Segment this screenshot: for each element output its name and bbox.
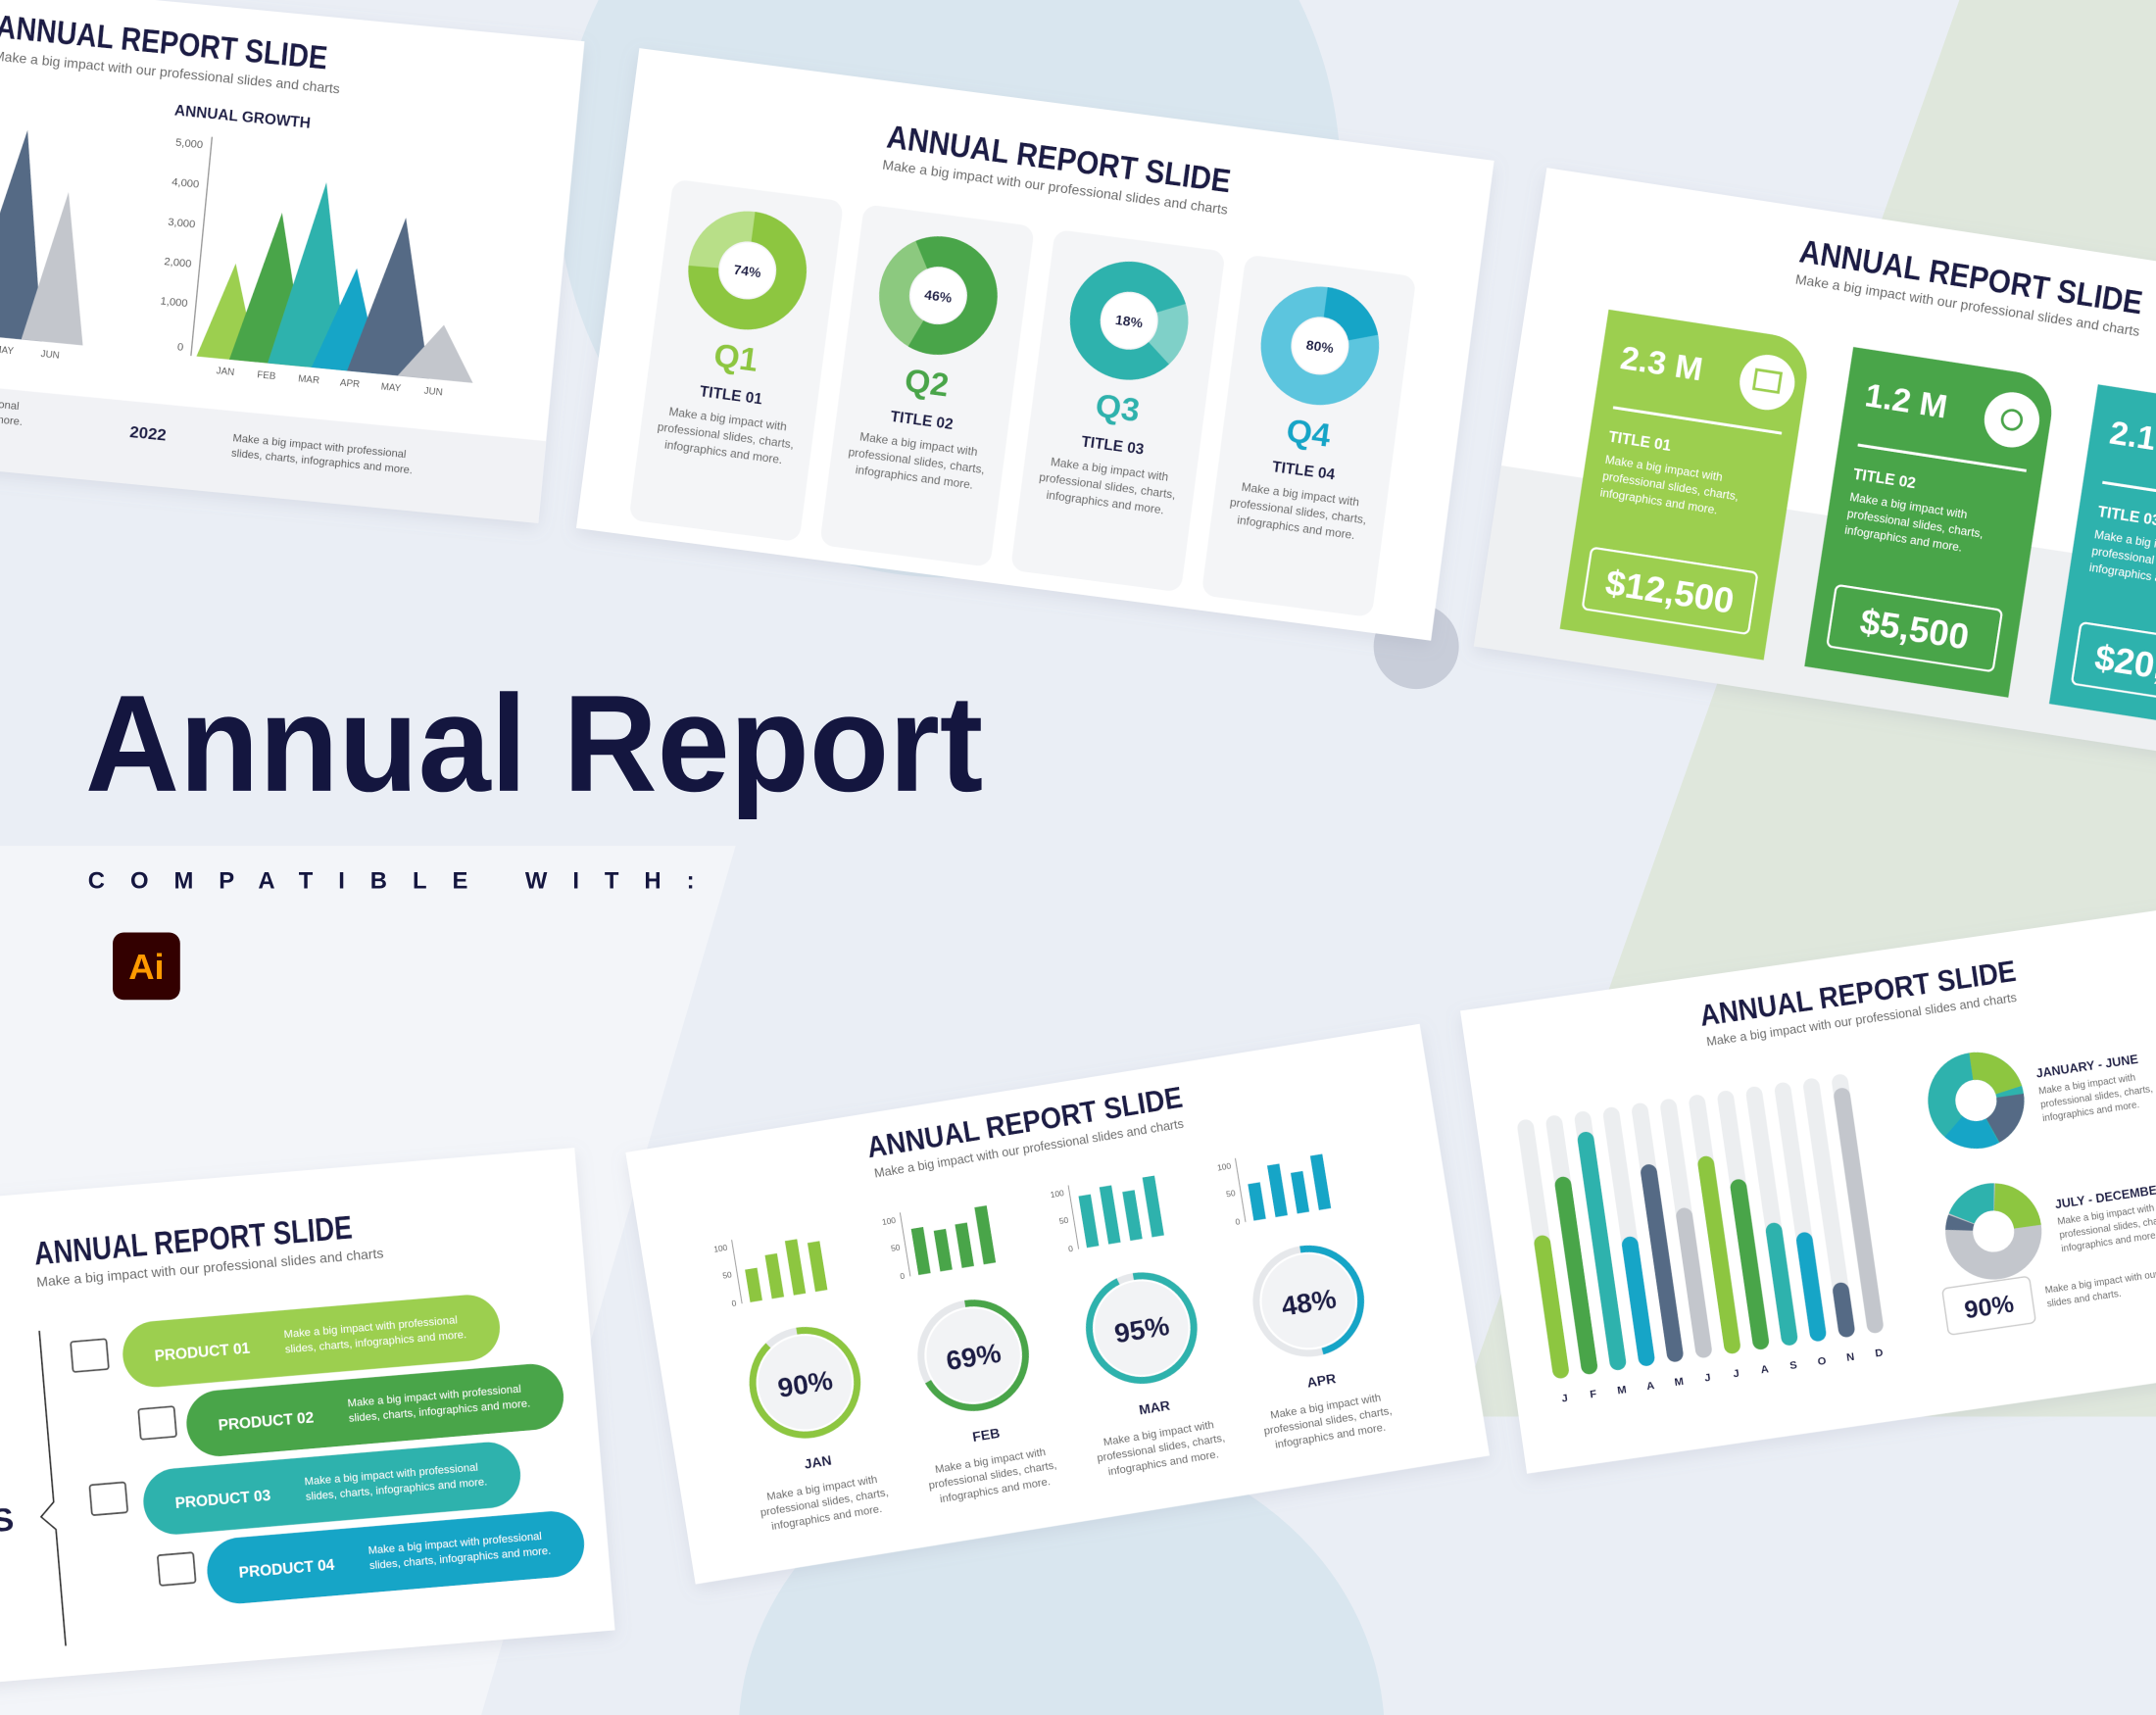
card 2: Make a big impact with: [1849, 490, 1968, 521]
column FEB: [881, 1195, 1060, 1507]
donut: January - June: infographics and more.: [2042, 1100, 2140, 1124]
slide: annual growth (top-left): 1,000: [160, 296, 188, 310]
bar chart: S: [1788, 1359, 1798, 1372]
card 1: TITLE 01: [1607, 429, 1673, 455]
bar chart: D: [1875, 1347, 1884, 1359]
card 1: professional slides, charts,: [1601, 468, 1740, 504]
panel Q4: TITLE 04: [1271, 459, 1336, 483]
product 01: slides, charts, infographics and more.: [284, 1329, 467, 1355]
product 03: slides, charts, infographics and more.: [306, 1476, 488, 1503]
bar chart: [1516, 1073, 1888, 1405]
column FEB: 50: [890, 1243, 902, 1253]
bar chart: A: [1760, 1363, 1770, 1376]
column APR: professional slides, charts,: [1263, 1405, 1393, 1438]
product 03: Make a big impact with professional: [304, 1462, 478, 1488]
product 02: PRODUCT 02: [218, 1409, 315, 1434]
slide: value cards (top-right): Make a big impact with our professional slides and charts: [1794, 271, 2141, 339]
column JAN: 90%: [775, 1365, 835, 1403]
panel Q2: TITLE 02: [890, 409, 955, 433]
slide: monthly rings (bottom-middle): ANNUAL REPORT SLIDE: [864, 1080, 1185, 1164]
product 02: slides, charts, infographics and more.: [349, 1397, 531, 1425]
column MAR: 0: [1067, 1244, 1074, 1254]
column APR: 48%: [1279, 1283, 1339, 1322]
column APR: 100: [1216, 1161, 1232, 1173]
slide: quarterly donuts (top-middle): Make a big impact with our professional slides and charts: [882, 156, 1229, 218]
slide: annual growth (top-left): JUN: [40, 349, 60, 362]
column JAN: 100: [713, 1243, 728, 1254]
column JAN: infographics and more.: [771, 1503, 883, 1533]
card 1: infographics and more.: [1599, 485, 1719, 516]
card 2: TITLE 02: [1852, 466, 1917, 492]
card 1: [1560, 310, 1813, 661]
column MAR: 100: [1050, 1188, 1065, 1200]
panel Q2: Make a big impact with: [858, 430, 978, 459]
bar chart: O: [1817, 1355, 1828, 1368]
slide: monthly bars and donuts (bottom-right): Make a big impact with our professional slides and charts: [1705, 991, 2018, 1049]
callout: 90%: Make a big impact with our: [2044, 1269, 2156, 1297]
panel Q3: 18%: [1114, 312, 1145, 331]
panel Q3: Q3: [1094, 388, 1142, 429]
slide: annual growth (top-left): MAY: [380, 381, 402, 394]
panel Q2: professional slides, charts,: [848, 445, 986, 476]
bar chart: J: [1704, 1372, 1711, 1384]
card 1: 2.3 M: [1618, 340, 1705, 388]
panel Q4: 80%: [1305, 337, 1335, 356]
slide: annual growth (top-left): [0, 0, 584, 523]
slide: annual growth (top-left): slides, charts, infographics and more.: [230, 448, 414, 476]
panel Q3: [1010, 229, 1226, 593]
column FEB: professional slides, charts,: [928, 1460, 1057, 1493]
bar chart: A: [1645, 1380, 1655, 1393]
column FEB: Make a big impact with: [934, 1446, 1047, 1476]
slide: products (bottom-left): [0, 1148, 615, 1702]
donut: January - June: professional slides, charts,: [2040, 1084, 2154, 1110]
bar chart: J: [1561, 1393, 1569, 1404]
slide: annual growth (top-left): 5,000: [175, 137, 204, 151]
column FEB: 69%: [944, 1338, 1004, 1376]
panel Q2: [819, 204, 1035, 567]
slide: products (bottom-left): ANNUAL REPORT SLIDE: [32, 1209, 354, 1273]
panel Q3: professional slides, charts,: [1039, 470, 1176, 502]
panel Q1: TITLE 01: [699, 383, 763, 408]
column FEB: infographics and more.: [939, 1476, 1052, 1505]
column MAR: 50: [1058, 1215, 1069, 1226]
icon: Adobe Illustrator: Ai: [128, 947, 165, 987]
slide: monthly rings (bottom-middle): Make a big impact with our professional slides and charts: [873, 1117, 1185, 1181]
column JAN: [712, 1221, 892, 1535]
product 04: PRODUCT 04: [238, 1557, 335, 1582]
bar chart: M: [1674, 1376, 1685, 1389]
column APR: APR: [1305, 1370, 1337, 1391]
slide: annual growth (top-left): 4,000: [172, 176, 200, 191]
card 2: infographics and more.: [1843, 522, 1963, 554]
slide: annual growth (top-left): ANNUAL GROWTH: [173, 103, 312, 132]
product 01: Make a big impact with professional: [283, 1314, 458, 1341]
slide: annual growth (top-left): 0: [176, 342, 184, 354]
bar chart: J: [1733, 1367, 1740, 1380]
donut: July - December: Make a big impact with: [2057, 1203, 2155, 1228]
slide: monthly bars and donuts (bottom-right): [1460, 888, 2156, 1474]
slide: value cards (top-right): [1474, 168, 2156, 777]
column APR: 0: [1235, 1216, 1241, 1227]
column APR: infographics and more.: [1274, 1422, 1387, 1451]
column APR: 50: [1225, 1188, 1237, 1200]
column MAR: infographics and more.: [1107, 1448, 1220, 1479]
callout: 90%: [1942, 1258, 2156, 1335]
slide: annual growth (top-left): 3,000: [168, 217, 196, 230]
panel Q1: infographics and more.: [663, 437, 783, 466]
card 3: [2049, 384, 2156, 735]
callout: 90%: slides and charts.: [2046, 1289, 2122, 1310]
column JAN: 50: [722, 1269, 733, 1281]
product 04: Make a big impact with professional: [368, 1531, 542, 1557]
donut: July - December: [1940, 1159, 2156, 1285]
column FEB: FEB: [971, 1425, 1001, 1445]
panel Q3: Make a big impact with: [1050, 455, 1169, 484]
slide: annual growth (top-left): 2,000: [164, 256, 192, 270]
product 03: [141, 1440, 523, 1537]
card 1: $12,500: [1603, 562, 1737, 621]
column APR: [1216, 1140, 1396, 1453]
slide: annual growth (top-left): APR: [339, 377, 361, 390]
column JAN: 0: [731, 1298, 737, 1308]
panel Q1: Make a big impact with: [668, 405, 788, 434]
donut: January - June: Make a big impact with: [2038, 1072, 2136, 1097]
product 02: Make a big impact with professional: [347, 1384, 521, 1410]
slide: annual growth (top-left): JAN: [216, 366, 235, 378]
panel Q1: professional slides, charts,: [657, 419, 795, 452]
column FEB: 0: [900, 1271, 906, 1281]
product 02: [184, 1361, 566, 1459]
slide: products (bottom-left): Make a big impact with our professional slides and charts: [36, 1245, 384, 1290]
card 1: Make a big impact with: [1604, 453, 1724, 484]
panel Q2: infographics and more.: [855, 463, 974, 492]
panel Q1: [628, 179, 844, 542]
column FEB: 100: [881, 1215, 897, 1227]
column JAN: Make a big impact with: [766, 1474, 878, 1503]
product 04: slides, charts, infographics and more.: [369, 1545, 552, 1572]
product 01: PRODUCT 01: [154, 1341, 251, 1365]
panel Q2: Q2: [903, 363, 951, 405]
panel Q4: [1201, 254, 1416, 617]
column MAR: Make a big impact with: [1102, 1419, 1215, 1448]
panel Q1: 74%: [733, 262, 762, 280]
card 2: $5,500: [1857, 601, 1972, 658]
subtitle: compatible with: COMPATIBLE WITH:: [88, 868, 695, 895]
slide: annual growth (top-left): 2022: [129, 422, 168, 444]
panel Q4: Q4: [1284, 413, 1333, 455]
panel Q4: infographics and more.: [1237, 513, 1355, 542]
column MAR: [1050, 1167, 1228, 1481]
column JAN: professional slides, charts,: [760, 1487, 890, 1519]
panel Q3: TITLE 03: [1080, 433, 1146, 459]
product 04: [205, 1509, 587, 1606]
card 2: [1804, 347, 2057, 698]
donut: January - June: [1926, 1032, 2156, 1151]
panel Q2: 46%: [923, 286, 954, 306]
slide: annual growth (top-left): ANNUAL REPORT SLIDE: [0, 9, 329, 76]
bar chart: M: [1617, 1384, 1627, 1396]
slide: monthly bars and donuts (bottom-right): ANNUAL REPORT SLIDE: [1697, 954, 2018, 1033]
column JAN: JAN: [803, 1452, 833, 1472]
panel Q3: infographics and more.: [1046, 488, 1165, 516]
card 2: 1.2 M: [1863, 377, 1949, 425]
slide: annual growth (top-left): Make a big impact with professional: [232, 432, 407, 461]
slide: annual growth (top-left): FEB: [257, 369, 276, 382]
panel Q4: Make a big impact with: [1241, 480, 1360, 510]
slide: annual growth (top-left): Make a big impact with our professional slides and charts: [0, 48, 341, 97]
callout: 90%: 90%: [1963, 1291, 2016, 1325]
panel Q1: Q1: [711, 337, 760, 379]
product 01: [121, 1293, 503, 1390]
column MAR: professional slides, charts,: [1097, 1433, 1226, 1465]
bar chart: F: [1590, 1388, 1597, 1400]
icon: Adobe Illustrator: [113, 932, 180, 1000]
bar chart: N: [1845, 1351, 1855, 1364]
slide: quarterly donuts (top-middle): ANNUAL REPORT SLIDE: [885, 119, 1233, 200]
slide: annual growth (top-left): JUN: [423, 385, 443, 398]
column APR: Make a big impact with: [1269, 1392, 1382, 1421]
title: Annual Report: [85, 666, 983, 820]
product 03: PRODUCT 03: [174, 1488, 271, 1512]
panel Q4: professional slides, charts,: [1229, 495, 1367, 527]
column MAR: MAR: [1138, 1397, 1171, 1418]
card 2: professional slides, charts,: [1846, 507, 1984, 541]
donut: January - June: JANUARY - JUNE: [2035, 1053, 2139, 1081]
column MAR: 95%: [1112, 1310, 1171, 1349]
slide: quarterly donuts (top-middle): [576, 48, 1494, 641]
slide: annual growth (top-left): MAR: [298, 373, 320, 386]
slide: monthly rings (bottom-middle): [625, 1024, 1490, 1585]
